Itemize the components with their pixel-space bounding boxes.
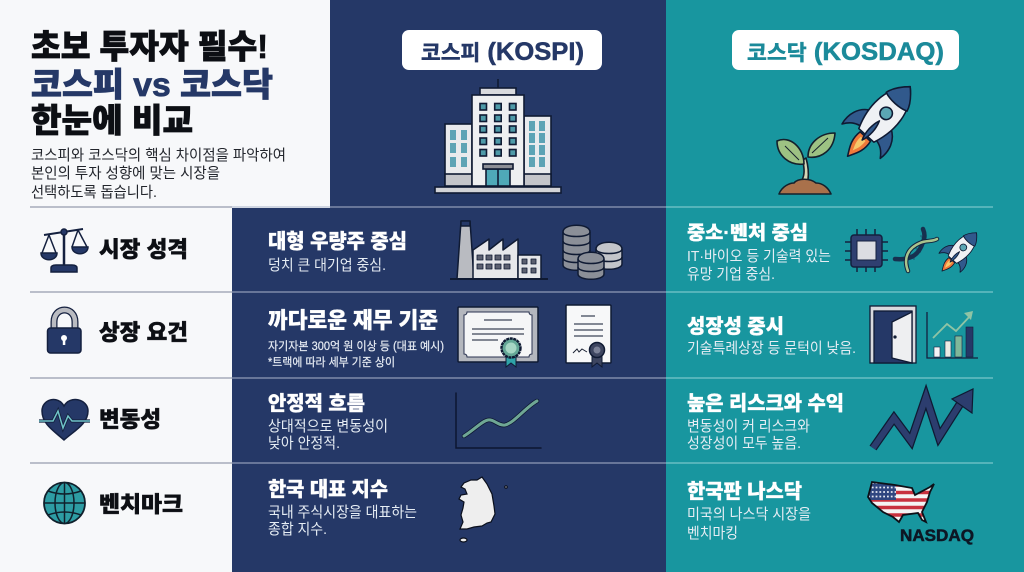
KOSPI row 4 text: 국내 주식시장을 대표하는: [268, 504, 417, 521]
title: 코스피 vs 코스닥: [31, 66, 273, 103]
KOSDAQ row 4 text: 미국의 나스닥 시장을: [687, 506, 811, 523]
icon: office buildings: [435, 79, 561, 193]
KOSDAQ row 3 text: 높은 리스크와 수익: [687, 392, 844, 415]
KOSPI row 4 text: [268, 478, 417, 538]
title: [31, 28, 273, 139]
intro text: [31, 147, 286, 201]
NASDAQ label: NASDAQ: [900, 527, 974, 545]
icon: open door: [870, 306, 916, 363]
icon: USA flag map: [866, 479, 938, 524]
intro text: 선택하도록 돕습니다.: [31, 184, 157, 201]
KOSPI row 1 text: 대형 우량주 중심: [268, 230, 407, 253]
KOSPI header pill: [402, 30, 602, 70]
label: listing requirements: 상장 요건: [99, 320, 188, 345]
KOSDAQ row 4 text: [687, 480, 811, 542]
KOSDAQ row 3 text: [687, 392, 844, 452]
label: market character: 시장 성격: [99, 237, 188, 262]
KOSDAQ row 2 text: [687, 315, 856, 357]
KOSPI row 3 text: 낮아 안정적.: [268, 435, 340, 452]
KOSPI row 3 text: 상대적으로 변동성이: [268, 418, 388, 435]
icon: scales: [41, 229, 88, 272]
KOSDAQ header pill: [732, 30, 959, 70]
KOSPI row 4 text: 한국 대표 지수: [268, 478, 388, 501]
icon: microchip: [845, 229, 888, 272]
label: volatility: 변동성: [99, 407, 161, 432]
KOSDAQ row 2 text: 성장성 중시: [687, 315, 784, 338]
row dividers: [30, 207, 993, 463]
KOSDAQ row 1 text: 유망 기업 중심.: [687, 266, 775, 283]
KOSPI row 2 text: [268, 308, 444, 369]
title: 초보 투자자 필수!: [31, 28, 268, 65]
icon: DNA helix: [895, 229, 937, 271]
KOSDAQ row 3 text: 변동성이 커 리스크와: [687, 418, 810, 435]
icon: certificate: [458, 307, 538, 367]
chart: stable line: [456, 393, 541, 448]
chart: growth bars: [927, 311, 978, 358]
KOSPI row 1 text: [268, 230, 407, 274]
panel: KOSPI column: [232, 0, 666, 572]
KOSDAQ row 4 text: 한국판 나스닥: [687, 480, 802, 503]
icon: sprout: [777, 133, 835, 194]
intro text: 코스피와 코스닥의 핵심 차이점을 파악하여: [31, 147, 286, 164]
KOSPI row 2 text: 자기자본 300억 원 이상 등 (대표 예시): [268, 339, 444, 353]
KOSDAQ header pill: 코스닥 (KOSDAQ): [747, 38, 944, 66]
KOSPI row 2 text: *트랙에 따라 세부 기준 상이: [268, 356, 395, 369]
KOSDAQ row 1 text: 중소·벤처 중심: [687, 222, 808, 244]
icon: factory: [450, 221, 548, 279]
intro text: 본인의 투자 성향에 맞는 시장을: [31, 165, 220, 182]
panel: KOSDAQ column: [666, 0, 1024, 572]
icon: globe: [44, 482, 85, 524]
icon: heart with pulse: [39, 400, 90, 440]
icon: small rocket: [931, 223, 987, 281]
KOSDAQ row 1 text: IT·바이오 등 기술력 있는: [687, 248, 831, 265]
KOSDAQ row 2 text: 기술특례상장 등 문턱이 낮음.: [687, 340, 856, 357]
label: benchmark: 벤치마크: [99, 492, 183, 517]
KOSPI row 4 text: 종합 지수.: [268, 521, 327, 538]
title: 한눈에 비교: [31, 102, 193, 139]
KOSPI row 3 text: [268, 392, 388, 452]
KOSDAQ row 3 text: 성장성이 모두 높음.: [687, 435, 801, 452]
icon: padlock: [48, 310, 81, 353]
icon: signed document: [566, 305, 611, 367]
icon: large rocket: [828, 69, 930, 174]
KOSPI row 1 text: 덩치 큰 대기업 중심.: [268, 257, 386, 274]
icon: coin stacks: [563, 225, 622, 279]
KOSDAQ row 1 text: [687, 222, 831, 283]
KOSPI row 3 text: 안정적 흐름: [268, 392, 365, 415]
KOSPI row 2 text: 까다로운 재무 기준: [268, 308, 438, 333]
icon: Korea map: [459, 477, 507, 542]
KOSDAQ row 4 text: 벤치마킹: [687, 525, 738, 542]
icon: volatile up arrow: [873, 389, 973, 448]
KOSPI header pill: 코스피 (KOSPI): [421, 38, 584, 66]
